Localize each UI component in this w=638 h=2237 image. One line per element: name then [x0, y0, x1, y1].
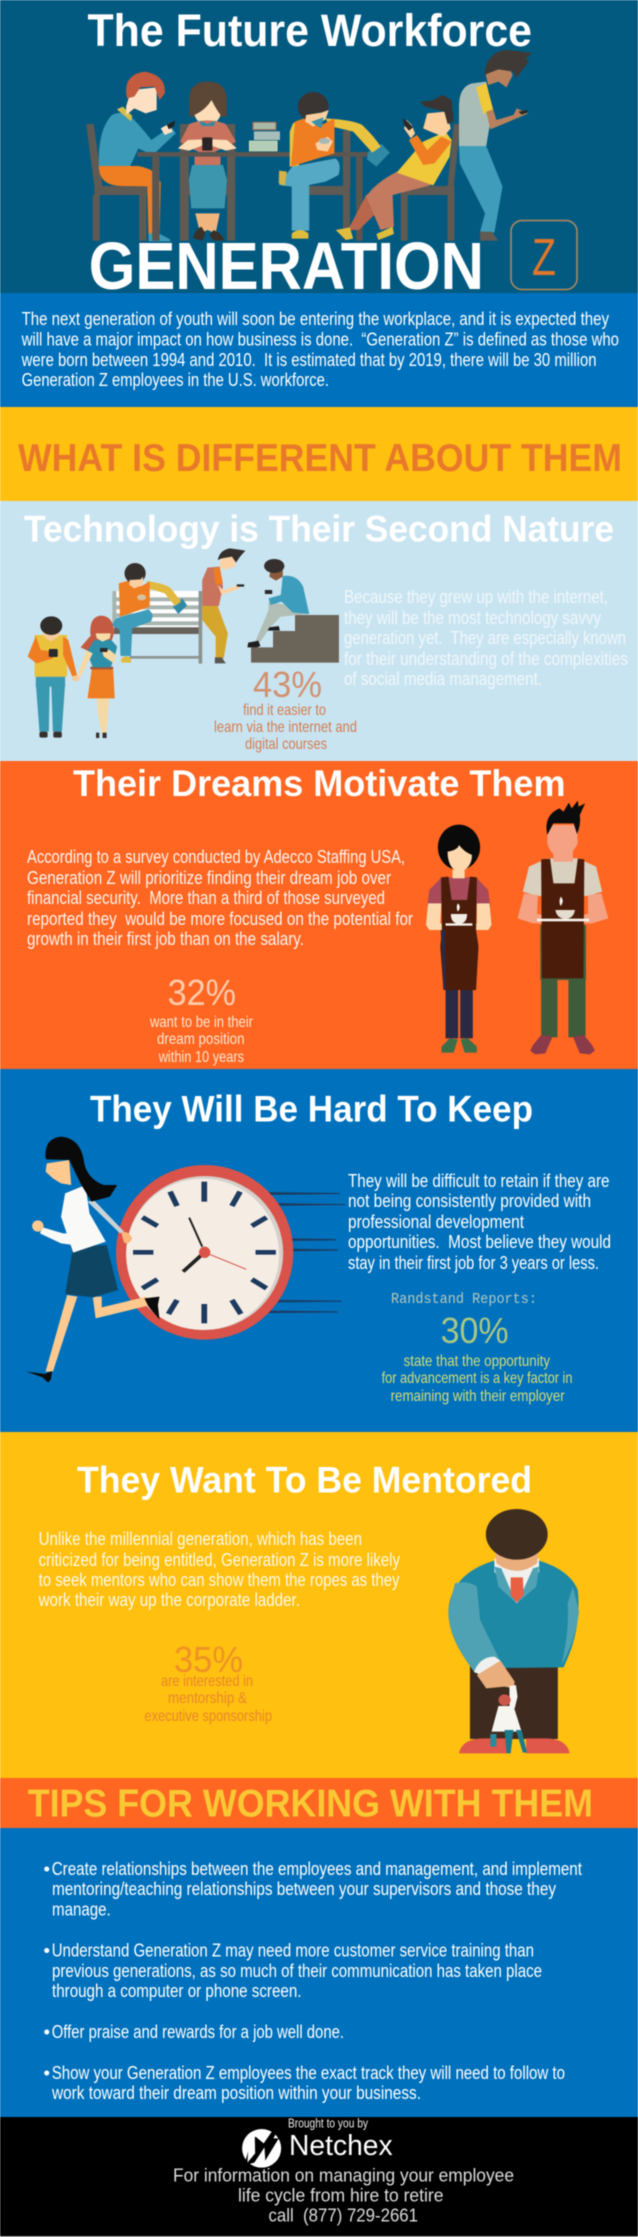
clock [116, 1165, 293, 1340]
icon: Z badge [511, 220, 577, 290]
illustration: young people with phones [28, 548, 339, 738]
body text: financial security. More than a third of those surveyed [27, 887, 385, 908]
person standing with mustard pants [202, 548, 245, 663]
stack of books [249, 122, 280, 151]
body text: of social media management. [344, 668, 542, 689]
tip 4 [44, 2062, 565, 2103]
tip 2: Understand Generation Z may need more customer service training than [52, 1940, 534, 1961]
tip 2: through a computer or phone screen. [52, 1980, 302, 2001]
body text: reported they would be more focused on the potential for [27, 908, 413, 929]
girl [77, 616, 117, 738]
tip 3: Offer praise and rewards for a job well done. [52, 2021, 344, 2042]
body text: criticized for being entitled, Generation Z is more likely [39, 1549, 401, 1570]
panel: technology [0, 501, 638, 761]
panel: dreams [0, 761, 638, 1069]
body text [344, 586, 628, 689]
illustration: mentor and small employee [448, 1509, 579, 1753]
illustration: woman running with clock [26, 1137, 345, 1383]
stat: 35%: executive sponsorship [144, 1708, 272, 1725]
panel: footer [0, 2116, 638, 2237]
contact text: call (877) 729-2661 [268, 2206, 418, 2226]
mentor [448, 1509, 579, 1753]
person 5: standing [459, 50, 532, 241]
icon: Netchex logo [242, 2126, 281, 2168]
tip 2 [44, 1940, 542, 2001]
panel: header [0, 0, 638, 304]
stat: 35%: 35% [174, 1639, 243, 1680]
stat: 32% [149, 972, 254, 1066]
female barista [426, 825, 492, 1053]
stairs [251, 615, 339, 663]
body text: professional development [348, 1211, 524, 1232]
body text: Unlike the millennial generation, which has been [39, 1528, 362, 1549]
intro text: Generation Z employees in the U.S. workforce. [22, 369, 329, 390]
contact text: life cycle from hire to retire [238, 2186, 444, 2206]
stat: 30%: remaining with their employer [391, 1388, 565, 1405]
tip 1 [44, 1858, 582, 1920]
source label: Randstand Reports: [391, 1291, 537, 1308]
title: The Future Workforce [88, 5, 532, 56]
tip 2: • [44, 1940, 50, 1961]
chairs [86, 124, 460, 241]
running woman [26, 1137, 160, 1383]
contact text: For information on managing your employee [173, 2166, 514, 2186]
tip 4: work toward their dream position within your business. [51, 2082, 421, 2103]
body text: According to a survey conducted by Adecco Staffing USA, [27, 846, 405, 867]
tip 4: • [44, 2062, 50, 2083]
panel: introduction [0, 293, 638, 407]
sponsor line: Brought to you by [288, 2116, 368, 2131]
stat: 43%: 43% [253, 664, 322, 705]
male barista [518, 801, 608, 1054]
stat: 43% [214, 664, 357, 753]
body text: work their way up the corporate ladder. [38, 1589, 300, 1610]
panel: what is different banner [0, 407, 638, 501]
panel: tips banner [0, 1778, 638, 1828]
stat: 35%: mentorship & [168, 1690, 247, 1707]
stat: 32%: 32% [168, 972, 236, 1013]
small employee [490, 1685, 527, 1753]
body text: to seek mentors who can show them the ropes as they [39, 1569, 400, 1590]
table [138, 152, 378, 241]
heading: tips: TIPS FOR WORKING WITH THEM [28, 1782, 593, 1826]
stat: 30% [382, 1310, 572, 1405]
stat: 30%: 30% [441, 1310, 509, 1351]
body text [27, 846, 413, 949]
person 2: girl [178, 82, 237, 241]
body text: growth in their first job than on the salary. [27, 928, 304, 949]
person 3: seated with crossed legs [279, 92, 390, 239]
body text: not being consistently provided with [348, 1190, 591, 1211]
bench [112, 591, 202, 664]
body text [348, 1170, 611, 1273]
stat: 35% [144, 1639, 272, 1725]
speed lines [248, 1192, 345, 1313]
stat: 43%: find it easier to [243, 702, 326, 719]
panel: hard to keep [0, 1069, 638, 1432]
heading: dreams: Their Dreams Motivate Them [73, 763, 566, 804]
stat: 35%: are interested in [161, 1673, 253, 1690]
intro text [21, 308, 619, 390]
heading: hard to keep: They Will Be Hard To Keep [90, 1088, 533, 1130]
stat: 43%: digital courses [245, 736, 327, 753]
stat: 32%: want to be in their [149, 1014, 254, 1031]
panel: mentored [0, 1432, 638, 1778]
icon: Z badge: Z [532, 229, 556, 287]
tip 1: manage. [52, 1899, 111, 1920]
stat: 30%: state that the opportunity [404, 1353, 550, 1370]
illustration: students on phones at a table [86, 50, 532, 241]
stat: 43%: learn via the internet and [214, 719, 357, 736]
stat: 30%: for advancement is a key factor in [382, 1370, 572, 1387]
boy [28, 616, 79, 738]
contact text [173, 2166, 514, 2226]
heading: technology: Technology is Their Second Nature [24, 508, 614, 550]
heading: mentored: They Want To Be Mentored [77, 1460, 532, 1500]
person 4: leaning back in chair [336, 95, 454, 240]
person sitting on stairs [247, 559, 309, 647]
person 1: redhead [99, 72, 176, 241]
tip 2: previous generations, as so much of their communication has taken place [52, 1960, 542, 1981]
stat: 32%: within 10 years [158, 1049, 244, 1066]
body text: Generation Z will prioritize finding their dream job over [27, 867, 391, 888]
heading: Generation: GENERATION [89, 229, 484, 304]
panel: tips list [0, 1828, 638, 2117]
body text [38, 1528, 401, 1610]
stat: 32%: dream position [157, 1031, 244, 1048]
brand name: Netchex [289, 2130, 393, 2162]
illustration: two baristas [426, 801, 608, 1054]
tip 1: • [44, 1858, 50, 1879]
tip 3: • [44, 2021, 50, 2042]
person on bench [112, 563, 187, 663]
